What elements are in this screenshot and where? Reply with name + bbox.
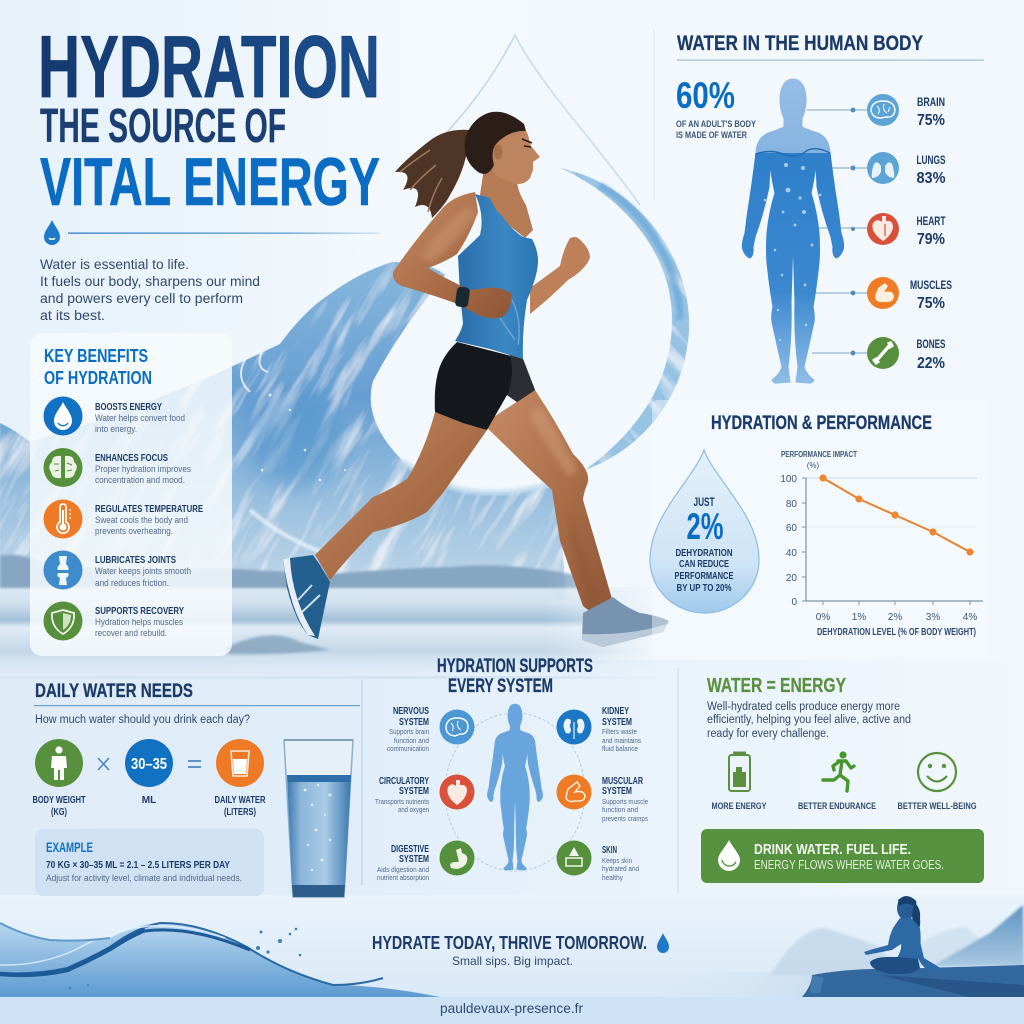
organ: bones — [867, 337, 946, 372]
system: kidney: SYSTEM — [602, 717, 632, 728]
panel: water in the human body — [654, 30, 984, 383]
benefit: enhances focus: Proper hydration improves — [95, 464, 191, 474]
formula: multiply sign — [98, 758, 109, 770]
back arm — [393, 192, 511, 318]
water glass — [284, 740, 353, 897]
benefit: enhances focus — [44, 448, 191, 487]
heading: HYDRATION SUPPORTS — [437, 656, 593, 677]
callout: 2 percent drop — [650, 450, 759, 613]
line chart: 20 — [786, 573, 797, 584]
icon: title drop and rule — [44, 220, 380, 245]
title: VITAL ENERGY — [40, 144, 380, 220]
tank top — [455, 194, 538, 359]
organ: brain — [867, 94, 945, 129]
body silhouette — [487, 704, 543, 870]
icon: tagline drop — [657, 933, 669, 953]
panel: hydration supports every system — [362, 656, 648, 885]
footer wave illustration — [0, 922, 440, 997]
line chart: 0 — [791, 597, 797, 608]
benefit: supports recovery — [44, 602, 184, 640]
ear — [494, 145, 502, 159]
formula: body weight: BODY WEIGHT — [32, 795, 86, 806]
intro text — [40, 257, 260, 323]
icon: battery: MORE ENERGY — [712, 801, 767, 812]
formula: daily water: (LITERS) — [224, 807, 256, 818]
hero illustration: sea and horizon — [0, 555, 700, 679]
left shoe — [283, 555, 330, 639]
footer mountains and rock with meditating figure — [640, 896, 1024, 997]
system: muscular: SYSTEM — [602, 786, 632, 797]
system: kidney: fluid balance — [602, 744, 638, 753]
system: nervous: function and — [394, 736, 429, 745]
benefit: supports recovery: SUPPORTS RECOVERY — [95, 606, 184, 617]
callout: 2 percent drop: CAN REDUCE — [679, 559, 729, 570]
icon: runner — [798, 751, 876, 812]
system: nervous: Supports brain — [389, 727, 429, 736]
body figure — [742, 79, 844, 383]
formula: millilitres — [125, 739, 173, 806]
60 percent stat: IS MADE OF WATER — [676, 130, 747, 141]
organ: lungs: LUNGS — [916, 155, 946, 167]
benefit: boosts energy: into energy. — [95, 424, 137, 434]
example box — [35, 829, 264, 896]
neck and chest — [480, 168, 533, 238]
heading — [44, 346, 152, 388]
benefit: regulates temperature — [44, 500, 203, 538]
dashed ring — [445, 713, 585, 871]
benefit: supports recovery: recover and rebuild. — [95, 628, 167, 638]
system: skin — [556, 840, 639, 882]
connector lines — [807, 108, 867, 355]
line chart: 40 — [786, 548, 797, 559]
callout: 2 percent drop: DEHYDRATION — [676, 548, 732, 559]
heading: WATER IN THE HUMAN BODY — [677, 32, 923, 55]
title: HYDRATION — [38, 17, 380, 116]
formula: millilitres: ML — [142, 795, 156, 806]
icon: runner: BETTER ENDURANCE — [798, 801, 876, 812]
heading: WATER = ENERGY — [707, 675, 847, 697]
line chart: (%) — [807, 461, 820, 470]
closing tagline — [372, 933, 669, 968]
heading: KEY BENEFITS — [44, 346, 148, 366]
system: skin: healthy — [602, 873, 623, 882]
benefit: enhances focus: concentration and mood. — [95, 475, 185, 485]
organ: muscles: 75% — [917, 295, 945, 312]
organ: lungs: 83% — [916, 170, 946, 187]
organ: lungs — [867, 152, 946, 187]
example box: Adjust for activity level, climate and individual needs. — [46, 873, 242, 883]
intro text: and powers every cell to perform — [40, 291, 243, 306]
callout: 2 percent drop: PERFORMANCE — [674, 571, 734, 582]
organ: muscles: MUSCLES — [910, 280, 952, 292]
system: circulatory: CIRCULATORY — [379, 776, 429, 787]
title — [38, 17, 380, 220]
line chart — [780, 450, 983, 638]
system: skin: hydrated and — [602, 864, 639, 873]
watch — [455, 286, 470, 308]
system: nervous: SYSTEM — [399, 717, 429, 728]
benefit: lubricates joints: LUBRICATES JOINTS — [95, 555, 176, 566]
line chart: 80 — [786, 499, 797, 510]
banner: drink water: ENERGY FLOWS WHERE WATER GOES. — [754, 858, 944, 872]
example box: 70 KG × 30–35 ML = 2.1 – 2.5 LITERS PER DAY — [46, 859, 230, 871]
system: muscular: Supports muscle — [602, 797, 648, 806]
benefit: boosts energy: BOOSTS ENERGY — [95, 402, 162, 413]
system: muscular: function and — [602, 805, 638, 814]
icon: smiley — [898, 753, 976, 812]
system: nervous: NERVOUS — [393, 706, 429, 717]
organ: brain: BRAIN — [917, 97, 945, 109]
organ: bones: BONES — [916, 339, 946, 351]
benefit: boosts energy — [44, 396, 185, 436]
description: efficiently, helping you feel alive, active and — [707, 714, 911, 726]
60 percent stat: 60% — [676, 75, 735, 116]
system: digestive: DIGESTIVE — [391, 844, 429, 855]
front arm — [530, 237, 590, 314]
benefit: supports recovery: Hydration helps muscles — [95, 617, 183, 627]
system: kidney: KIDNEY — [602, 706, 629, 717]
system: digestive: SYSTEM — [399, 854, 429, 865]
line chart: 60 — [786, 523, 797, 534]
face — [485, 123, 540, 184]
benefit: lubricates joints: Water keeps joints smooth — [95, 566, 191, 576]
system: circulatory: Transports nutrients — [375, 797, 429, 806]
formula: equals sign — [188, 761, 201, 767]
eye and brow — [522, 139, 532, 147]
benefit: regulates temperature: REGULATES TEMPERATURE — [95, 504, 203, 515]
system: muscular: prevents cramps — [602, 814, 648, 823]
right shoe — [582, 597, 669, 647]
callout: 2 percent drop: 2% — [686, 506, 724, 547]
intro text: It fuels our body, sharpens our mind — [40, 274, 260, 289]
panel: daily water needs — [32, 680, 360, 897]
panel: daily water needs: How much water should you drink each day? — [35, 714, 250, 726]
formula: daily water — [214, 739, 266, 818]
hair — [465, 112, 526, 174]
footer band with website: pauldevaux-presence.fr — [440, 1000, 583, 1016]
near leg — [483, 390, 612, 617]
intro text: Water is essential to life. — [40, 257, 189, 272]
meditating woman — [864, 896, 947, 974]
heading: HYDRATION & PERFORMANCE — [711, 412, 932, 434]
line chart: PERFORMANCE IMPACT — [781, 450, 857, 459]
panel: hydration and performance — [650, 400, 988, 656]
organ: bones: 22% — [917, 355, 945, 372]
banner: drink water: DRINK WATER. FUEL LIFE. — [754, 842, 911, 858]
panel: water equals energy — [678, 668, 984, 893]
closing tagline: Small sips. Big impact. — [452, 954, 573, 968]
formula: body weight — [32, 739, 86, 818]
system: muscular — [556, 774, 648, 823]
line chart: 0% — [816, 612, 830, 623]
description: Well-hydrated cells produce energy more — [707, 701, 900, 713]
far leg — [315, 412, 487, 580]
system: circulatory — [375, 774, 474, 814]
formula: millilitres: 30–35 — [131, 756, 167, 773]
benefit: regulates temperature: prevents overheating. — [95, 526, 173, 536]
system: digestive: nutrient absorption — [377, 873, 429, 882]
line chart: 100 — [780, 474, 797, 485]
benefit: lubricates joints: and reduces friction. — [95, 578, 169, 588]
benefit: boosts energy: Water helps convert food — [95, 413, 185, 423]
heading: OF HYDRATION — [44, 368, 152, 388]
callout: 2 percent drop: JUST — [694, 497, 714, 509]
system: nervous — [387, 706, 474, 753]
title: THE SOURCE OF — [40, 100, 286, 153]
benefit: lubricates joints — [44, 550, 191, 590]
banner: drink water — [701, 829, 984, 883]
callout: 2 percent drop: BY UP TO 20% — [676, 583, 732, 594]
system: skin: Keeps skin — [602, 856, 632, 865]
system: digestive: Aids digestion and — [377, 865, 429, 874]
panel: hydration supports every system: EVERY SYSTEM — [448, 676, 553, 697]
example box: EXAMPLE — [46, 839, 93, 855]
icon: smiley: BETTER WELL-BEING — [898, 801, 976, 812]
line chart: 1% — [852, 612, 866, 623]
system: kidney: Filters waste — [602, 727, 637, 736]
line chart: 4% — [963, 612, 977, 623]
system: digestive — [377, 840, 474, 882]
system: nervous: communication — [387, 744, 429, 753]
organ: muscles — [867, 277, 952, 312]
system: muscular: MUSCULAR — [602, 776, 644, 787]
panel: key benefits of hydration — [30, 333, 232, 656]
formula: daily water: DAILY WATER — [214, 795, 266, 806]
organ: heart — [867, 213, 946, 248]
organ: heart: HEART — [916, 216, 946, 228]
system: circulatory: SYSTEM — [399, 786, 429, 797]
organ: heart: 79% — [917, 231, 945, 248]
60 percent stat: OF AN ADULT'S BODY — [676, 119, 757, 130]
runner illustration — [283, 112, 669, 647]
footer band with website — [0, 997, 1024, 1024]
description — [707, 701, 911, 740]
system: kidney: and maintains — [602, 736, 641, 745]
ponytail — [395, 130, 470, 218]
icon: battery — [712, 752, 767, 812]
closing tagline: HYDRATE TODAY, THRIVE TOMORROW. — [372, 933, 647, 953]
60 percent stat — [676, 75, 757, 141]
system: kidney — [556, 706, 641, 753]
organ: brain: 75% — [917, 112, 945, 129]
shorts — [435, 342, 535, 430]
system: circulatory: and oxygen — [398, 805, 429, 814]
formula: body weight: (KG) — [51, 807, 67, 818]
line chart: 3% — [926, 612, 940, 623]
heading: DAILY WATER NEEDS — [35, 680, 193, 702]
description: ready for every challenge. — [707, 728, 829, 740]
line chart: 2% — [888, 612, 902, 623]
benefit: enhances focus: ENHANCES FOCUS — [95, 453, 168, 464]
hero illustration: water drop and wave — [0, 10, 838, 852]
benefit: regulates temperature: Sweat cools the body and — [95, 515, 188, 525]
system: skin: SKIN — [602, 845, 617, 856]
intro text: at its best. — [40, 308, 105, 323]
